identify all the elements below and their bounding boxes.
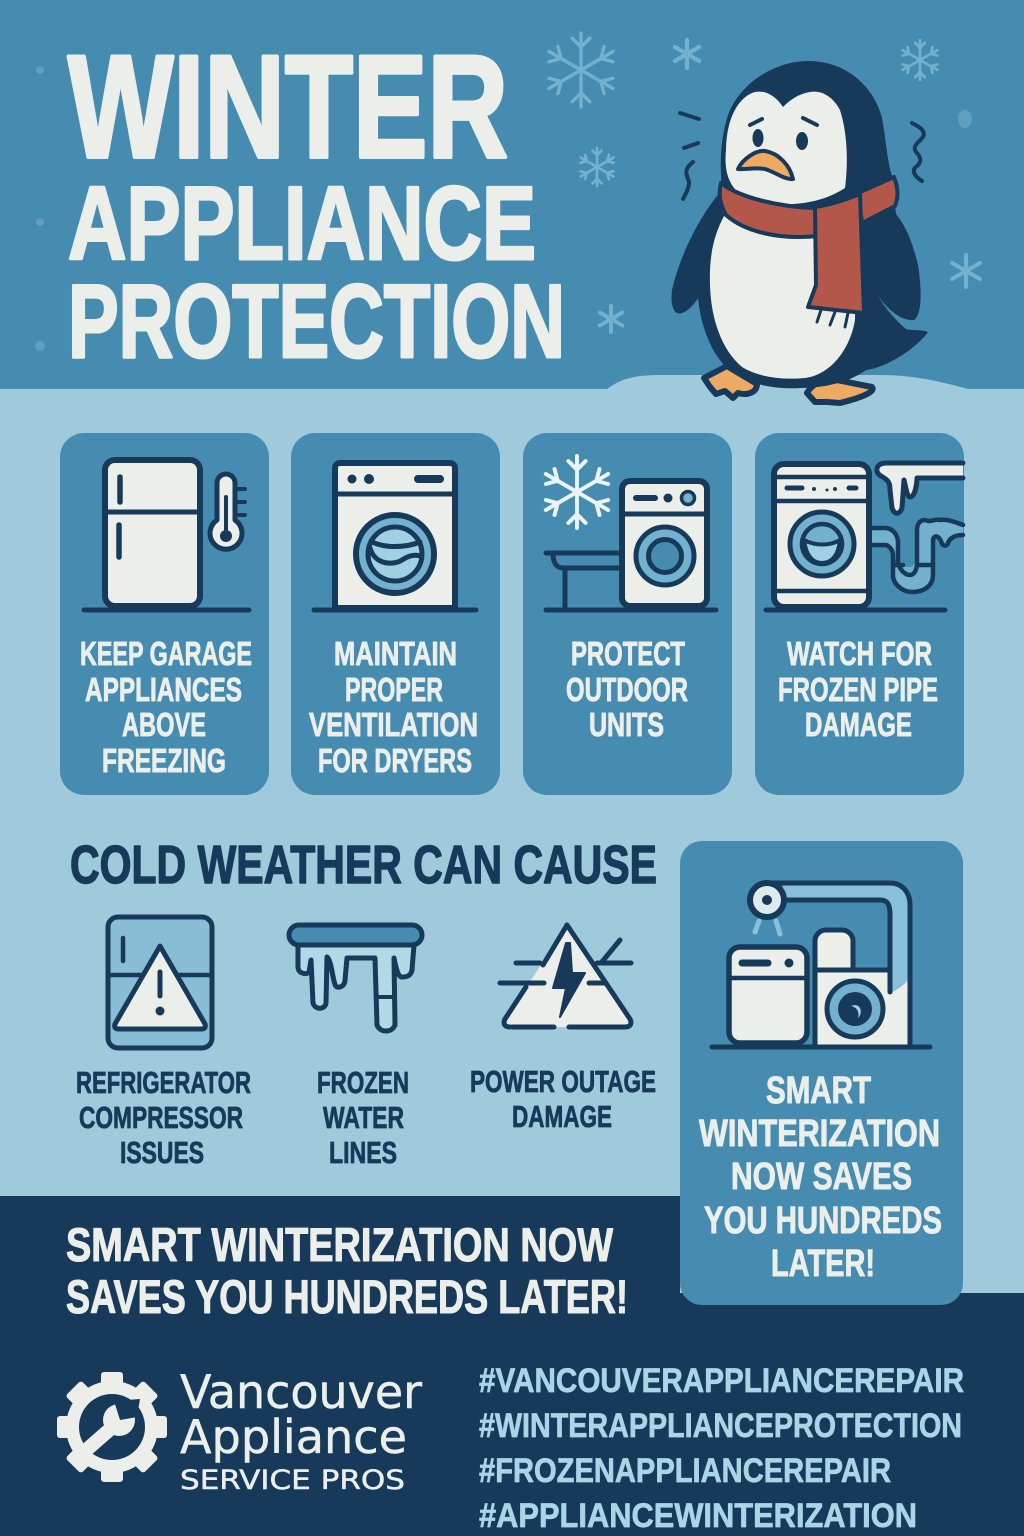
panel: smart winterization <box>680 841 963 1305</box>
card: garage appliances <box>60 433 269 795</box>
icon: snowflake right <box>952 255 980 287</box>
icon: large snowflake <box>545 33 617 107</box>
label: COMPRESSOR <box>79 1100 243 1135</box>
label: FOR DRYERS <box>318 742 472 779</box>
logo wordmark: Vancouver <box>180 1365 422 1419</box>
title: PROTECTION <box>68 264 565 380</box>
scarf fringe <box>817 310 848 327</box>
logo wordmark: SERVICE PROS <box>180 1465 405 1496</box>
shiver marks <box>680 113 924 199</box>
eyes <box>752 129 808 150</box>
icon: icicles <box>289 925 422 1031</box>
label: KEEP GARAGE <box>80 635 252 672</box>
label: VENTILATION <box>309 706 478 743</box>
label: FREEZING <box>102 742 226 779</box>
label <box>778 635 938 743</box>
icon: gear and wrench <box>57 1372 167 1482</box>
label <box>309 635 478 779</box>
hashtags: #FROZENAPPLIANCEREPAIR <box>479 1452 891 1490</box>
item: power outage damage <box>470 925 656 1134</box>
logo wordmark: Appliance <box>180 1410 407 1464</box>
label: POWER OUTAGE <box>470 1064 656 1099</box>
label: UNITS <box>589 706 664 743</box>
label: OUTDOOR <box>566 671 688 708</box>
snow specks <box>35 66 972 351</box>
banner text: SMART WINTERIZATION NOW <box>66 1218 614 1271</box>
beak <box>738 151 793 179</box>
icon: fridge with thermometer <box>84 460 249 610</box>
label <box>80 635 252 779</box>
label: PROPER <box>345 671 443 708</box>
item: frozen water lines <box>289 925 422 1170</box>
heading: cold weather can cause: COLD WEATHER CAN CAUSE <box>70 835 657 895</box>
icon: power warning <box>500 925 631 1027</box>
snowflakes <box>545 33 980 332</box>
icon: snowflake lower <box>600 306 622 332</box>
banner text <box>66 1218 628 1323</box>
label: FROZEN PIPE <box>778 671 938 708</box>
card: dryer ventilation <box>291 433 500 795</box>
body <box>671 61 928 388</box>
label: APPLIANCES <box>85 671 242 708</box>
footer band <box>0 1196 1024 1536</box>
label <box>317 1065 409 1170</box>
label: ISSUES <box>120 1135 204 1170</box>
label: LATER! <box>771 1243 875 1285</box>
card: outdoor units <box>523 433 732 795</box>
hashtags <box>479 1362 964 1535</box>
icon: appliances with pipe <box>712 883 930 1047</box>
label <box>699 1070 942 1285</box>
logo <box>57 1365 422 1496</box>
label: YOU HUNDREDS <box>704 1200 942 1242</box>
scarf <box>720 177 898 313</box>
item: refrigerator compressor issues <box>76 917 251 1170</box>
penguin <box>671 61 928 403</box>
title <box>68 25 565 380</box>
icon: fridge warning <box>108 917 212 1048</box>
label: NOW SAVES <box>731 1156 912 1198</box>
icon: snowflake and outdoor unit <box>542 456 716 610</box>
feet <box>704 366 873 403</box>
title: WINTER <box>68 25 508 188</box>
hashtags: #APPLIANCEWINTERIZATION <box>479 1497 917 1535</box>
belly <box>710 216 856 379</box>
icon: dryer <box>314 463 476 610</box>
label: DAMAGE <box>805 706 912 743</box>
snow mound <box>606 375 972 390</box>
hashtags: #VANCOUVERAPPLIANCEREPAIR <box>479 1362 964 1400</box>
card: frozen pipes <box>755 433 964 795</box>
label <box>566 635 688 743</box>
label: REFRIGERATOR <box>76 1065 251 1100</box>
icon: snowflake top right <box>900 40 940 80</box>
banner text: SAVES YOU HUNDREDS LATER! <box>66 1270 628 1323</box>
label: WATCH FOR <box>787 635 932 672</box>
label: MAINTAIN <box>334 635 457 672</box>
face <box>726 92 847 204</box>
label: LINES <box>329 1135 397 1170</box>
label: FROZEN <box>317 1065 409 1100</box>
title: APPLIANCE <box>68 166 536 282</box>
header band <box>0 0 1024 389</box>
brows <box>750 118 817 125</box>
label: SMART <box>766 1070 871 1112</box>
logo wordmark <box>180 1365 422 1496</box>
icon: washer with frozen pipes <box>766 463 963 610</box>
label: WINTERIZATION <box>699 1113 940 1155</box>
label <box>76 1065 251 1170</box>
icon: snowflake left <box>578 148 616 186</box>
label: WATER <box>323 1100 404 1135</box>
label: ABOVE <box>122 706 206 743</box>
label <box>470 1064 656 1134</box>
icon: small snowflake top <box>675 40 699 68</box>
label: PROTECT <box>571 635 685 672</box>
label: DAMAGE <box>512 1099 612 1134</box>
